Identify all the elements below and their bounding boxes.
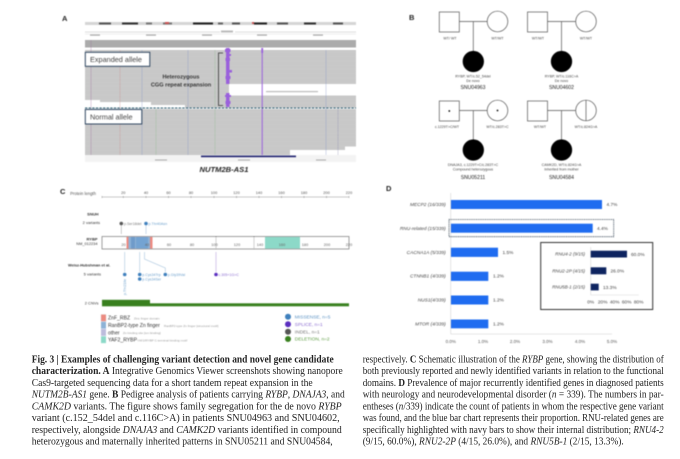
bar values [493,202,618,327]
pedigree SNU04584: WT/WT [534,125,547,129]
protein length axis: 220 [346,190,353,195]
figure caption: left column: CAMK2D variants. The figure shows family segregation for the de novo RYBP [32,401,342,412]
variant type legend: INDEL, n=1 [295,329,320,335]
read mismatch columns [91,40,338,155]
protein length axis: 120 [233,190,241,195]
RYBP protein track: 180 [302,242,309,247]
domain legend: ZnF_RBZ [108,316,130,322]
pedigree SNU04963: WT/ WT [443,36,457,40]
figure caption: right column: respectively. C Schematic illustration of the RYBP gene, showing the distribution of [363,354,664,366]
RYBP protein track: 20 [121,242,126,247]
panel label C: C [60,187,66,196]
Weisz-Hubshman variants: p.Cys34Ser [142,278,162,282]
panel C: RYBP gene schematic [60,187,353,344]
gene labels: CACNA1A (5/339) [407,250,446,256]
annotation: repeat expansion [151,74,212,88]
inset: RNU genes: 60% [622,300,632,306]
pedigree SNU04963: WT/WT [491,36,504,40]
inset: RNU genes: 60.0% [631,252,645,258]
pedigree SNU04602: De novo [555,79,568,83]
figure caption: right column: specifically highlighted with navy bars to show their internal distribution; RNU4-2 [363,425,664,436]
bars [451,200,602,328]
Weisz-Hubshman variants [68,252,239,295]
RYBP protein track: 100 [211,242,219,247]
variant type legend: SPLICE, n=1 [295,322,323,328]
RYBP protein track: 120 [234,242,241,247]
pedigree SNU04584: SNU04584 [549,175,574,181]
CNV track [85,300,349,306]
allele divider [85,107,356,109]
figure caption: left column: Fig. 3 | Examples of challenging variant detection and novel gene candidate [32,354,334,366]
inset: RNU genes: 13.3% [603,285,617,291]
bracket [218,53,223,106]
gene name: NUTM2B-AS1 [200,165,248,174]
gene labels: MTOR (4/339) [415,321,446,327]
axis: 4.0% [575,339,585,344]
coverage track [85,40,356,48]
inset: RNU genes: RNU4-2 (9/15) [555,252,585,257]
pedigree SNU04602: WT/WT [532,36,545,40]
RYBP protein track: 200 [324,242,331,247]
pedigree SNU04963 [439,11,508,91]
callout: normal allele [85,110,142,124]
gene track [85,155,356,162]
RYBP protein track: NM_012234 [76,241,98,246]
protein length axis: Protein length [70,191,97,196]
protein length axis: 180 [301,190,308,195]
gene labels: NUS1(4/339) [418,298,446,304]
callout: expanded allele: Expanded allele [90,55,142,64]
bar values: 1.2% [493,298,505,304]
panel A: IGV screenshot [62,14,356,174]
figure caption: right column: with neurology and neurodevelopmental disorder (n = 339). The numbers in par- [363,390,664,400]
bar values: 4.7% [606,202,618,208]
pedigree SNU05211: c.1229T>C/WT [435,125,460,129]
Weisz-Hubshman variants: p.Thr21Ile [123,279,127,295]
pedigree SNU04584: CAMK2D, WT/c.824G>A [542,163,582,167]
figure caption: left column: characterization. A Integrative Genomics Viewer screenshots showing nanopore [32,366,343,377]
pedigree SNU04963: De novo [466,79,480,83]
chromosome ideogram [85,22,356,25]
genomic ruler [85,30,356,36]
pedigree SNU05211: WT/c.283T>C [486,125,509,129]
bar values: 1.2% [493,321,505,327]
figure caption: left column: heterozygous and maternally inherited patterns in SNU05211 and SNU04584, [32,436,333,448]
panel D: prevalence bar chart [386,184,653,344]
pedigree SNU04584: Inherited from mother [544,168,579,172]
gene labels: RNU-related (15/339) [400,226,446,232]
panel label D: D [386,184,392,193]
axis: 5.0% [607,339,617,344]
pedigree SNU04602 [528,11,596,91]
axis: 0.0% [446,339,456,344]
variant type legend: DELETION, n=2 [295,337,330,343]
axis: 1.0% [478,339,488,344]
purple insertion marks [225,48,263,155]
inset: RNU genes [541,242,653,310]
pedigree SNU04584: WT/c.824G>A [575,125,598,129]
axis: 2.0% [510,339,520,344]
bar values: 1.2% [493,274,505,280]
figure caption: left column: respectively, alongside DNAJA3 and CAMK2D variants identified in compound [32,425,342,436]
domain legend [101,314,218,344]
variant type legend [285,314,331,343]
protein length axis [70,190,353,198]
bar values: 4.4% [597,226,609,232]
RYBP protein track [76,236,353,249]
pedigree SNU05211: Compound heterozygous [453,168,493,172]
inset: RNU genes: 80% [634,300,644,306]
pedigree SNU04602: RYBP, WT/c.116C>A [545,74,579,78]
inset: RNU genes: 26.0% [610,268,625,274]
pedigree SNU05211: DNAJA3, c.1229T>C/c.283T>C [448,163,498,167]
inset: RNU genes: 0% [587,300,595,306]
protein length axis: 140 [256,190,263,195]
gene labels: MECP2 (16/339) [410,202,446,208]
highlight box [449,220,614,237]
annotation: repeat expansion: CGG repeat expansion [151,82,212,88]
RYBP protein track: RYBP [87,236,98,242]
figure caption: left column: Cas9-targeted sequencing data for a short tandem repeat expansion in the [32,378,313,389]
panel label B: B [409,13,415,22]
figure caption: left column: variant (c.152_54del and c.116C>A) in patients SNU04963 and SNU04602, [32,413,340,424]
domain legend: YAF2/RYBP C-terminal binding motif [137,338,187,342]
protein length axis: 200 [323,190,331,195]
figure caption: right column: (9/15, 60.0%), RNU2-2P (4/15, 26.0%), and RNU5B-1 (2/15, 13.3%). [363,436,624,448]
panel B: pedigrees [409,11,598,181]
axis: 3.0% [542,339,553,344]
figure caption: left column [31,354,345,448]
RYBP protein track: 220 [346,242,353,247]
axis [446,193,617,344]
SNUH variants: p.Ser18del [124,222,142,226]
Weisz-Hubshman variants: p.Gly39Val [168,273,185,277]
SNUH variants [83,212,167,234]
pedigree SNU04602: SNU04602 [549,85,574,91]
pedigree SNU04963: SNU04963 [461,85,486,91]
gene labels: CTNNB1 (4/339) [410,274,446,280]
domain legend: Zinc finger domain [134,316,160,320]
domain legend: RanBP2-type Zn finger [structural motif] [164,324,218,328]
Weisz-Hubshman variants: 5 variants [84,272,101,276]
domain legend: YAF2_RYBP [108,338,138,344]
protein length axis: 20 [121,190,126,195]
domain legend: other [108,330,120,336]
RYBP protein track: 80 [190,242,195,247]
pedigree SNU04963: RYBP, WT/c.52_54del [455,74,491,78]
inset: RNU genes: RNU2-2P (4/15) [552,268,585,273]
protein length axis: 80 [189,190,194,195]
pedigree SNU05211 [435,100,509,181]
figure caption: right column [363,354,664,448]
callout: normal allele: Normal allele [90,112,133,122]
SNUH variants: p.Thr40Asn [148,222,167,226]
Weisz-Hubshman variants: p.Cys34Trp [142,273,161,277]
pedigree SNU05211: SNU05211 [461,175,485,181]
inset: RNU genes: 20% [598,300,608,306]
panel label A: A [62,14,68,23]
annotation: repeat expansion: Heterozygous [162,74,200,80]
bar values: 1.5% [502,250,514,256]
RYBP protein track: 160 [279,242,286,247]
SNUH variants: SNUH [87,212,99,216]
domain legend: Zn binding site [ion binding] [123,331,161,335]
RYBP protein track: 40 [145,242,150,247]
protein length axis: 100 [211,190,218,195]
aligned reads [85,50,356,155]
callout: expanded allele [85,52,150,66]
figure caption: left column: NUTM2B-AS1 gene. B Pedigree analysis of patients carrying RYBP, DNAJA3, and [31,390,345,400]
SNUH variants: 2 variants [83,220,100,225]
CNV track: 2 CNVs [85,300,98,306]
pedigree SNU04602: WT/WT [580,36,593,40]
gene labels [400,202,446,327]
inset: RNU genes: RNU5B-1 (2/15) [552,285,585,290]
RYBP protein track: 60 [167,242,172,247]
Weisz-Hubshman variants: Weisz-Hubshman et al. [68,262,110,268]
RYBP protein track: 140 [257,242,264,247]
protein length axis: 160 [278,190,286,195]
protein length axis: 60 [166,190,171,195]
inset: RNU genes: 40% [610,300,620,306]
pedigree SNU04584 [528,100,598,181]
Weisz-Hubshman variants: c.305+1G>C [218,273,239,277]
protein length axis: 40 [144,190,149,195]
domain legend: RanBP2-type Zn finger [108,323,160,329]
variant type legend: MISSENSE, n=5 [295,314,331,320]
